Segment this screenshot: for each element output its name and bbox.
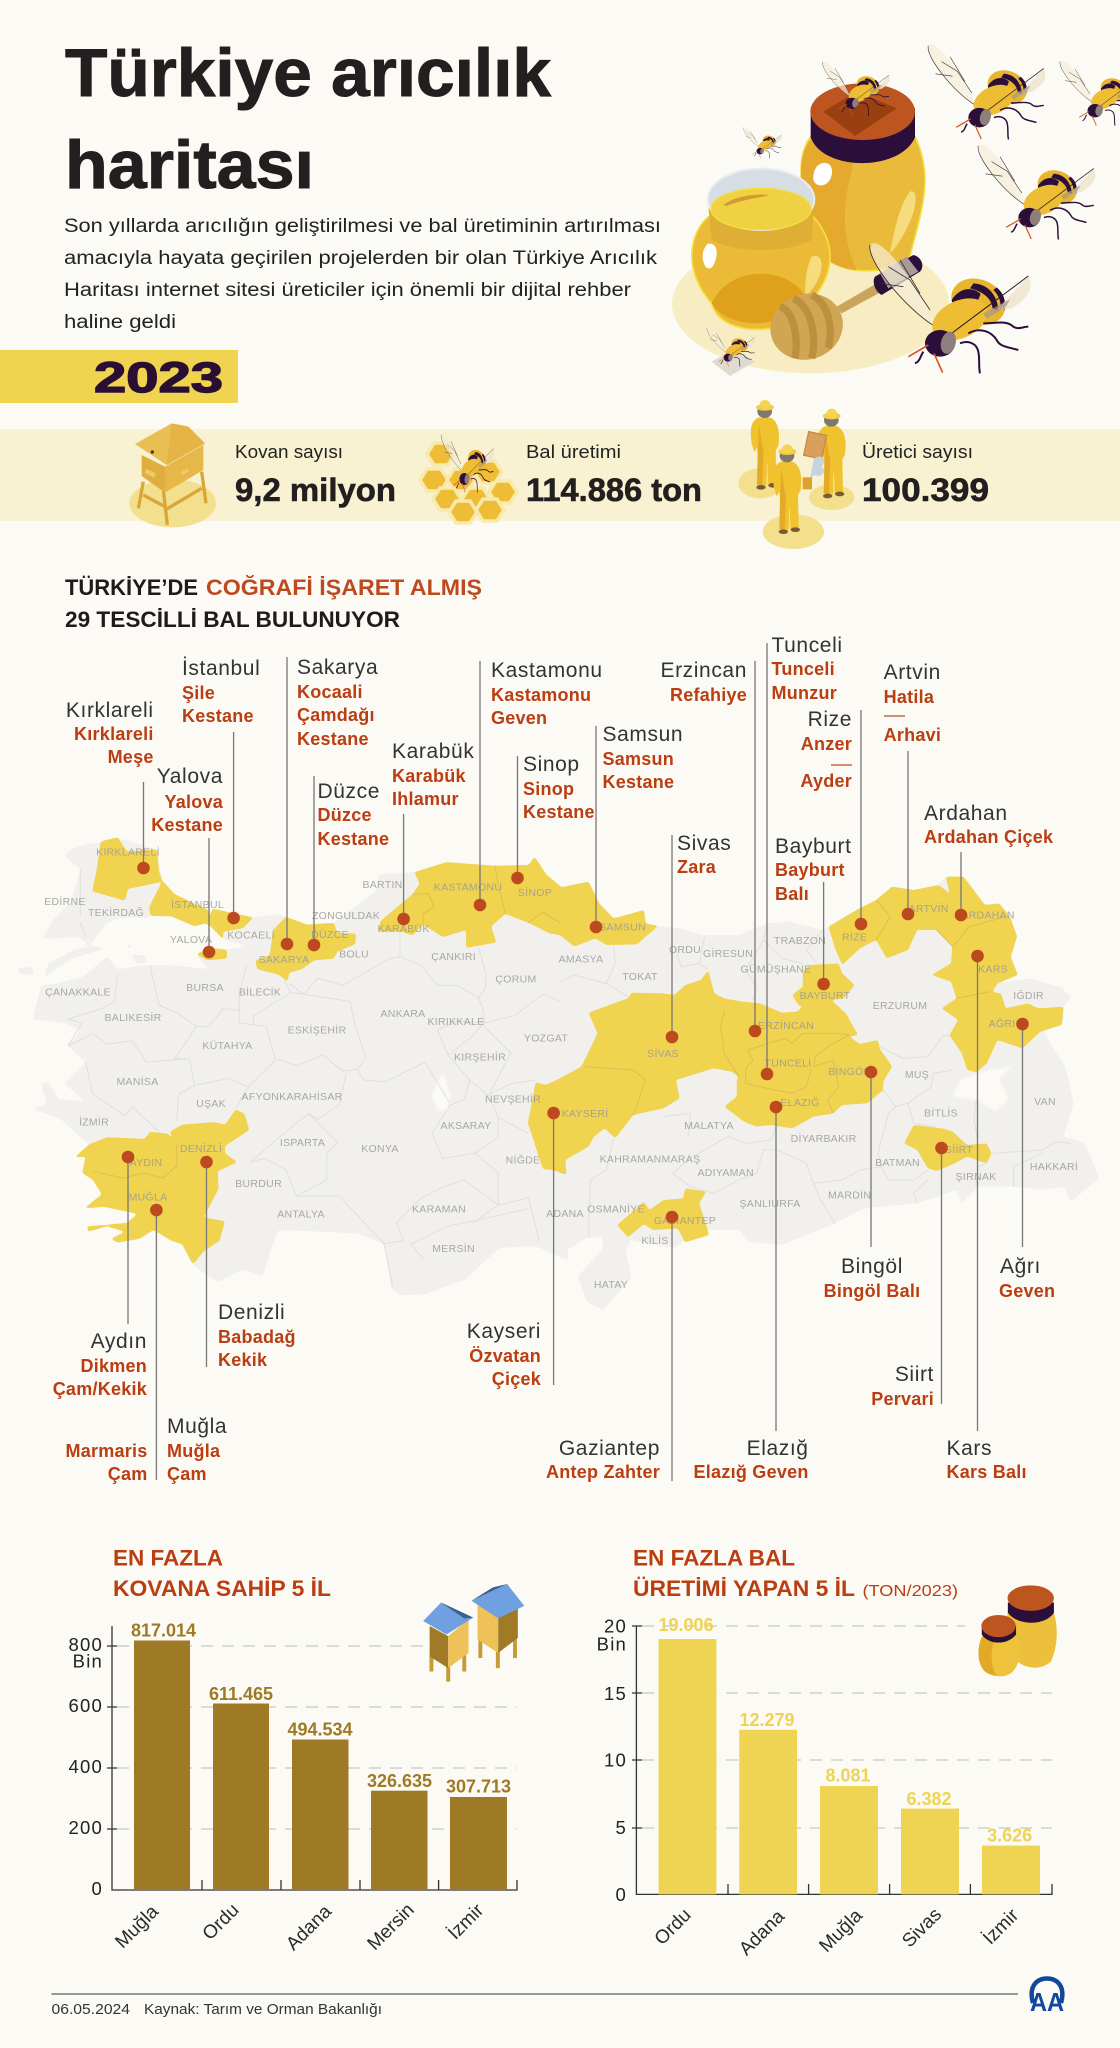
callout: Karabük: Karabük: [392, 740, 474, 763]
logo: AA: AA: [1030, 1987, 1064, 2017]
icon: bee on jar lid: [822, 61, 890, 116]
bar chart: hive counts: 817.014: [131, 1620, 196, 1640]
province name labels: BAYBURT: [800, 990, 851, 1002]
province name labels: SİVAS: [647, 1047, 679, 1060]
province name labels: ERZİNCAN: [758, 1019, 814, 1032]
callout: Düzce: Düzce: [318, 780, 380, 803]
province name labels: AMASYA: [559, 954, 603, 966]
icon: bee far right: [1060, 61, 1120, 126]
callout: Elazığ: Elazığ Geven: [694, 1462, 809, 1482]
bar chart: hive counts: Bin: [73, 1650, 103, 1672]
callout: Siirt: Siirt: [895, 1363, 934, 1386]
bar chart: honey production: 8.081: [825, 1766, 871, 1786]
province name labels: SAMSUN: [599, 922, 646, 934]
bar chart: hive counts: 200: [69, 1817, 103, 1838]
callout: Kastamonu: Kastamonu: [491, 685, 591, 705]
bar chart: hive counts: [69, 1620, 517, 1955]
callout: Muğla: Çam: [108, 1464, 148, 1484]
bar chart: honey production: 20: [604, 1616, 627, 1636]
callout: Siirt: Pervari: [871, 1389, 934, 1409]
callout: Siirt: [871, 1142, 948, 1409]
stats band: [0, 429, 1120, 521]
province name labels: ŞIRNAK: [956, 1171, 996, 1183]
province name labels: IĞDIR: [1013, 989, 1044, 1002]
province name labels: NİĞDE: [506, 1154, 540, 1166]
province name labels: NEVŞEHİR: [485, 1092, 541, 1106]
province name labels: ÇANKIRI: [431, 951, 476, 963]
chart heading: honey production: EN FAZLA BAL: [633, 1546, 795, 1570]
callout: Ağrı: Ağrı: [1000, 1255, 1041, 1278]
callout: Bingöl: [824, 1066, 920, 1301]
callout: Tunceli: Tunceli: [772, 659, 835, 679]
plate shadow: [672, 235, 949, 373]
title: [65, 35, 551, 203]
callout: Aydın: [53, 1151, 148, 1399]
province name labels: RİZE: [842, 930, 867, 944]
province name labels: BALIKESİR: [105, 1011, 162, 1024]
icon: small flying bee: [743, 127, 782, 158]
province name labels: KASTAMONU: [434, 882, 502, 894]
callout: Sakarya: Çamdağı: [297, 705, 375, 725]
province name labels: MARDİN: [828, 1188, 871, 1202]
stat: producer count: 100.399: [862, 472, 989, 508]
province name labels: HAKKARİ: [1030, 1160, 1078, 1173]
province name labels: ANKARA: [381, 1008, 425, 1020]
chart heading: hives: EN FAZLA: [113, 1546, 223, 1570]
province name labels: BİTLİS: [924, 1106, 958, 1120]
bar chart: honey production: Muğla: [815, 1905, 867, 1957]
bar chart: honey production: Adana: [735, 1906, 789, 1960]
bar chart: hive counts: 800: [69, 1634, 103, 1655]
province name labels: EDİRNE: [44, 895, 86, 908]
callout: Kırklareli: Kırklareli: [66, 699, 154, 722]
stat: honey production: 114.886 ton: [526, 472, 702, 508]
province name labels: OSMANİYE: [587, 1202, 645, 1216]
map heading: [65, 575, 482, 632]
callout: Kastamonu: Geven: [491, 708, 547, 728]
callout: Ardahan: [924, 802, 1054, 921]
callout: İstanbul: İstanbul: [182, 657, 260, 680]
year badge: 2023: [94, 354, 223, 402]
icon: blue-roofed hives: [423, 1584, 524, 1682]
map heading: COĞRAFİ İŞARET ALMIŞ: [206, 575, 482, 600]
callout: Bayburt: Bayburt: [775, 860, 845, 880]
callout: Sivas: Sivas: [677, 832, 731, 855]
icon: honey dipper: [761, 255, 922, 370]
province name labels: ADIYAMAN: [697, 1167, 754, 1179]
callout: Samsun: Kestane: [602, 772, 674, 792]
callout: Kırklareli: Kırklareli: [74, 724, 154, 744]
bar chart: honey production: [597, 1615, 1052, 1960]
callout: Denizli: [200, 1156, 296, 1370]
bar chart: hive counts: 0: [92, 1878, 103, 1899]
bar chart: honey production: 5: [616, 1817, 627, 1838]
callout: Düzce: Kestane: [318, 829, 389, 849]
callout: Aydın: Çam/Kekik: [53, 1379, 148, 1399]
callout: Aydın: Dikmen: [80, 1356, 147, 1376]
callout: Muğla: Muğla: [167, 1441, 221, 1461]
callout: Sinop: [511, 753, 595, 884]
bar chart: hive counts: İzmir: [444, 1900, 489, 1944]
callout: Kayseri: Kayseri: [467, 1320, 541, 1343]
bar chart: hive counts: 307.713: [446, 1777, 511, 1797]
province name labels: AYDIN: [130, 1157, 162, 1169]
stat: producer count: [862, 442, 989, 508]
footer rule: [52, 1993, 1018, 1995]
province name labels: ANTALYA: [277, 1208, 325, 1220]
callout: Kayseri: Özvatan: [469, 1346, 541, 1366]
bar chart: hive counts: 600: [69, 1695, 103, 1716]
province name labels: ZONGULDAK: [312, 910, 380, 922]
callout: Karabük: [392, 740, 474, 925]
province name labels: KARABÜK: [377, 923, 430, 935]
stat: producer count: Üretici sayısı: [862, 442, 973, 462]
province name labels: MUĞLA: [129, 1190, 167, 1204]
province name labels: KÜTAHYA: [202, 1040, 253, 1052]
province name labels: KIRŞEHİR: [454, 1050, 506, 1064]
map yellow provinces: east: [528, 877, 1064, 1242]
callout: Kars: Kars Balı: [946, 1462, 1027, 1482]
icon: honeycomb with bee: [420, 434, 517, 523]
icon: wooden hive: [129, 423, 216, 527]
intro paragraph: amacıyla hayata geçirilen projelerden bir olan Türkiye Arıcılık: [64, 248, 658, 269]
map province borders: [68, 866, 560, 1287]
callout: Bayburt: Bayburt: [775, 835, 852, 858]
bar chart: hive counts: Muğla: [111, 1901, 163, 1953]
province name labels: VAN: [1034, 1096, 1056, 1108]
province name labels: DİYARBAKIR: [791, 1132, 857, 1145]
callout: Sinop: Sinop: [523, 753, 580, 776]
province name labels: SAKARYA: [259, 954, 309, 966]
callout: Yalova: Kestane: [151, 815, 223, 835]
callout: Yalova: Yalova: [157, 765, 223, 788]
province name labels: ÇORUM: [495, 974, 537, 986]
callout: Gaziantep: [546, 1211, 678, 1482]
province name labels: AKSARAY: [441, 1120, 491, 1132]
callout: Düzce: [308, 776, 389, 951]
province name labels: KIRIKKALE: [428, 1016, 484, 1028]
province name labels: MALATYA: [684, 1120, 734, 1132]
bar chart: honey production: Bin: [597, 1634, 627, 1655]
province name labels: ORDU: [669, 944, 701, 956]
bar chart: honey production: 3.626: [987, 1826, 1032, 1846]
callout: Sinop: Sinop: [523, 779, 574, 799]
province name labels: KARS: [978, 964, 1008, 976]
province name labels: KONYA: [361, 1143, 399, 1155]
callout: Artvin: Hatila: [884, 687, 935, 707]
callout: Denizli: Kekik: [218, 1350, 268, 1370]
province name labels: HATAY: [594, 1279, 628, 1291]
year badge: [0, 350, 238, 403]
callout: Kastamonu: [474, 659, 603, 911]
province name labels: KOCAELİ: [227, 928, 275, 942]
province name labels: ŞANLIURFA: [739, 1198, 801, 1210]
icon: small glass jar: [692, 169, 830, 329]
bar chart: hive counts: 494.534: [287, 1720, 353, 1740]
callout: Muğla: Muğla: [167, 1415, 227, 1438]
intro paragraph: Son yıllarda arıcılığın geliştirilmesi ve bal üretiminin artırılması: [64, 216, 661, 237]
footer: date and source: Kaynak: Tarım ve Orman Bakanlığı: [144, 2002, 382, 2018]
callout: Kars: [946, 950, 1027, 1482]
province name labels: İSTANBUL: [171, 898, 224, 911]
icon: bee middle right: [978, 145, 1095, 239]
callout: Tunceli: Munzur: [772, 683, 837, 703]
callout: Muğla: [65, 1204, 227, 1484]
province name labels: YOZGAT: [524, 1032, 568, 1044]
province name labels: TEKİRDAĞ: [88, 906, 144, 919]
stat: honey production: [526, 442, 702, 508]
province name labels: KAYSERİ: [562, 1107, 608, 1120]
bar chart: hive counts: Ordu: [199, 1900, 243, 1944]
province name labels: KARAMAN: [412, 1204, 466, 1216]
bar chart: honey production: 6.382: [906, 1789, 952, 1809]
province name labels: UŞAK: [196, 1098, 226, 1110]
intro paragraph: haline geldi: [64, 312, 176, 333]
callout: İstanbul: Kestane: [182, 706, 254, 726]
callout: Rize: [800, 708, 867, 930]
callout: Denizli: Babadağ: [218, 1327, 296, 1347]
callout: Erzincan: Erzincan: [660, 659, 747, 682]
province name labels: ADANA: [546, 1208, 584, 1220]
bar chart: honey production: 19.006: [658, 1615, 714, 1635]
bar chart: hive counts: 611.465: [209, 1684, 273, 1704]
callout: Tunceli: [761, 634, 843, 1080]
icon: bee upper right: [928, 45, 1045, 139]
callout: Sakarya: Kocaali: [297, 682, 363, 702]
bar chart: honey production: İzmir: [979, 1905, 1024, 1949]
callout: Sakarya: Sakarya: [297, 656, 378, 679]
callout: Samsun: Samsun: [602, 749, 674, 769]
callout: Gaziantep: Gaziantep: [559, 1437, 660, 1460]
callout: Tunceli: Tunceli: [772, 634, 843, 657]
map land: east: [549, 877, 1099, 1310]
callout: Sakarya: Kestane: [297, 729, 369, 749]
callout: Denizli: Denizli: [218, 1301, 285, 1324]
province name labels: GAZİANTEP: [654, 1214, 716, 1227]
province name labels: İZMİR: [79, 1116, 109, 1128]
callout: Karabük: Ihlamur: [392, 789, 459, 809]
callout: Sivas: [666, 832, 731, 1043]
callout: Sinop: Kestane: [523, 802, 595, 822]
chart heading: honey production: ÜRETİMİ YAPAN 5 İL: [633, 1576, 855, 1601]
province name labels: TUNCELİ: [764, 1056, 812, 1070]
callout: Bayburt: Balı: [775, 884, 809, 904]
callout: Düzce: Düzce: [318, 805, 372, 825]
callout: Artvin: Artvin: [884, 661, 941, 684]
province name labels: GİRESUN: [703, 947, 753, 960]
province name labels: BATMAN: [875, 1157, 920, 1169]
intro paragraph: Haritası internet sitesi üreticiler için önemli bir dijital rehber: [64, 280, 632, 301]
callout: Bayburt: [775, 835, 852, 990]
callout: Samsun: Samsun: [602, 723, 683, 746]
intro paragraph: [64, 216, 661, 333]
bar chart: honey production: 0: [616, 1884, 627, 1905]
callout: Erzincan: Refahiye: [670, 685, 747, 705]
title: haritası: [65, 127, 314, 203]
province name labels: ARDAHAN: [961, 910, 1015, 922]
chart heading: honey production: [633, 1546, 958, 1601]
province name labels: BARTIN: [362, 879, 403, 891]
province name labels: ISPARTA: [280, 1137, 325, 1149]
province name labels: GÜMÜŞHANE: [741, 964, 811, 976]
callout: Karabük: Karabük: [392, 766, 467, 786]
illustration: honey jars, dipper and bees: [672, 45, 1120, 376]
province name labels: ÇANAKKALE: [45, 986, 111, 998]
province name labels: AĞRI: [989, 1017, 1015, 1030]
chart heading: hives: KOVANA SAHİP 5 İL: [113, 1576, 331, 1601]
bar chart: honey production: 15: [604, 1683, 627, 1704]
province name labels: BİNGÖL: [828, 1065, 870, 1078]
province name labels: YALOVA: [170, 934, 212, 946]
callout: Elazığ: Elazığ: [747, 1437, 809, 1460]
province name labels: MANİSA: [116, 1075, 159, 1088]
callout: Kırklareli: Meşe: [108, 747, 154, 767]
callout: Kars: Kars: [946, 1437, 992, 1460]
callout: Yalova: [151, 765, 224, 958]
chart heading: honey production: (TON/2023): [862, 1583, 958, 1600]
province name labels: SİNOP: [518, 886, 552, 899]
province name labels: KAHRAMANMARAŞ: [600, 1154, 700, 1166]
callout: Muğla: Çam: [167, 1464, 207, 1484]
map yellow provinces: west: [74, 837, 562, 1265]
province name labels: MUŞ: [905, 1069, 929, 1081]
footer: date and source: 06.05.2024: [52, 2002, 130, 2018]
province name labels: BİLECİK: [239, 986, 281, 998]
callout: Bingöl: Bingöl: [841, 1255, 903, 1278]
callout: Kayseri: [467, 1107, 560, 1389]
callout: Kırklareli: [66, 699, 154, 874]
chart heading: hives: [113, 1546, 331, 1601]
stat: hive count: 9,2 milyon: [235, 472, 396, 508]
callout: Ağrı: [999, 1018, 1055, 1301]
stat: hive count: Kovan sayısı: [235, 442, 343, 462]
callout: Sakarya: [281, 656, 378, 950]
province name labels: KİLİS: [641, 1234, 669, 1247]
callout: İstanbul: [182, 657, 260, 924]
callout: Ağrı: Geven: [999, 1281, 1055, 1301]
callout: Artvin: Arhavi: [884, 725, 941, 745]
province name labels: DÜZCE: [311, 929, 349, 941]
province name labels: BURDUR: [235, 1178, 282, 1190]
bar chart: honey production: Ordu: [651, 1905, 695, 1949]
callout: Yalova: Yalova: [164, 792, 224, 812]
province name labels: KIRKLARELİ: [96, 846, 160, 858]
stat: honey production: Bal üretimi: [526, 442, 621, 462]
province name labels: SİİRT: [945, 1143, 973, 1156]
province name labels: TOKAT: [622, 971, 658, 983]
stat: hive count: [235, 442, 396, 508]
callout: Artvin: [884, 661, 941, 920]
bar chart: hive counts: 400: [69, 1756, 103, 1777]
map of Turkey: [16, 837, 1099, 1310]
icon: tall honey jar: [801, 83, 925, 271]
bar chart: hive counts: Mersin: [364, 1900, 419, 1955]
callout: Bingöl: Bingöl Balı: [824, 1281, 920, 1301]
callout: Samsun: [590, 723, 683, 933]
callout: Sivas: Zara: [677, 857, 717, 877]
callout: Rize: Anzer: [801, 734, 852, 754]
province name labels: BURSA: [186, 982, 224, 994]
province name labels: ESKİŞEHİR: [288, 1024, 346, 1036]
bar chart: honey production: Sivas: [898, 1904, 946, 1952]
icon: honey jars small: [978, 1585, 1057, 1676]
bar chart: honey production: 10: [604, 1750, 627, 1770]
callout: Ardahan: Ardahan Çiçek: [924, 827, 1054, 847]
province name labels: MERSİN: [432, 1242, 475, 1255]
callout: Erzincan: [660, 659, 761, 1037]
title: Türkiye arıcılık: [65, 35, 551, 111]
bar chart: hive counts: Adana: [282, 1901, 336, 1955]
bar chart: honey production: 12.279: [739, 1710, 795, 1730]
callout: Rize: Rize: [808, 708, 852, 731]
province name labels: ELAZIĞ: [780, 1096, 820, 1109]
province name labels: ERZURUM: [873, 1000, 927, 1012]
footer: date and source: [52, 2002, 382, 2018]
callout: Kastamonu: Kastamonu: [491, 659, 603, 682]
map land: west: [16, 839, 568, 1295]
bar chart: hive counts: 326.635: [367, 1771, 432, 1791]
icon: beekeepers: [738, 400, 854, 549]
province name labels: AFYONKARAHİSAR: [241, 1090, 343, 1103]
map heading: 29 TESCİLLİ BAL BULUNUYOR: [65, 607, 400, 632]
callout: Aydın: Aydın: [91, 1330, 147, 1353]
callout: Muğla: Marmaris: [65, 1441, 148, 1461]
province name labels: [44, 846, 1078, 1291]
province name labels: BOLU: [339, 948, 369, 960]
callout: İstanbul: Şile: [182, 683, 215, 703]
callout: Kayseri: Çiçek: [492, 1369, 542, 1389]
callout: Ardahan: Ardahan: [924, 802, 1008, 825]
map heading: TÜRKİYE’DE: [65, 575, 198, 600]
province name labels: TRABZON: [774, 935, 826, 947]
callout: Gaziantep: Antep Zahter: [546, 1462, 660, 1482]
province name labels: DENİZLİ: [180, 1142, 222, 1155]
icon: bee large: [870, 243, 1030, 373]
callout: Rize: Ayder: [800, 771, 852, 791]
province name labels: ARTVİN: [909, 902, 949, 915]
icon: bee on tile: [707, 328, 755, 376]
callout: Elazığ: [694, 1101, 809, 1482]
